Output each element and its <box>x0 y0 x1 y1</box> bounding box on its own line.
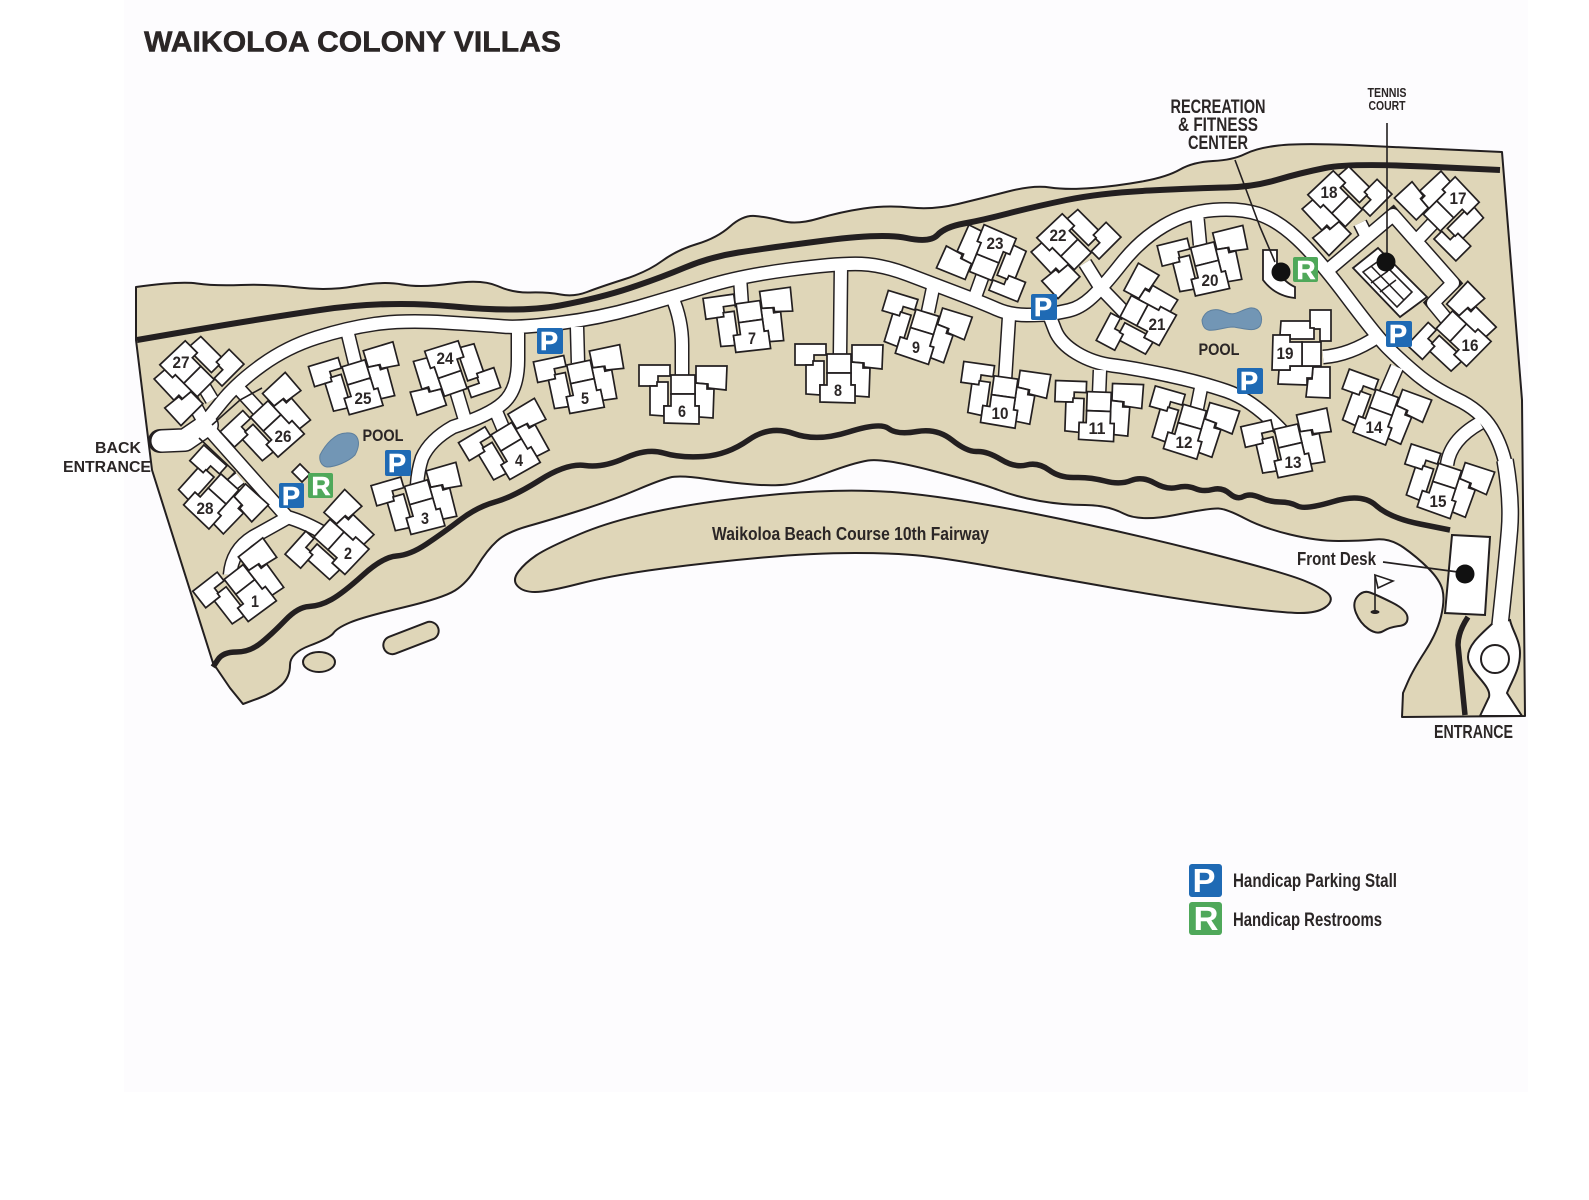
building 23 <box>936 214 1040 302</box>
building 8 <box>795 344 883 403</box>
icon: restroom 2: R <box>1296 255 1316 285</box>
legend <box>1189 862 1397 937</box>
thick top boundary line <box>137 165 1500 340</box>
label: tennis court: TENNIS <box>1368 85 1407 100</box>
label: front desk: Front Desk <box>1297 549 1377 569</box>
building 23: 23 <box>986 234 1004 253</box>
small sand oval <box>303 652 335 672</box>
building 10 <box>956 361 1051 432</box>
building 19: 19 <box>1276 344 1294 363</box>
icon: parking 5: P <box>1240 366 1258 396</box>
label: back entrance: BACK <box>95 440 141 457</box>
building 22 <box>1017 195 1121 299</box>
building 1: 1 <box>251 592 259 611</box>
building 25: 25 <box>354 389 372 408</box>
building 21: 21 <box>1148 315 1166 334</box>
tennis court <box>1353 248 1427 317</box>
icon: parking 6: P <box>1389 319 1407 349</box>
label: back entrance <box>63 440 151 476</box>
building 20 <box>1157 224 1257 303</box>
legend: restroom text: Handicap Restrooms <box>1233 910 1382 931</box>
icon: parking 4 <box>1031 292 1057 322</box>
building 2 <box>285 489 388 594</box>
tennis leader line <box>1386 123 1388 255</box>
building 26: 26 <box>274 427 292 446</box>
recreation building <box>1263 250 1295 298</box>
legend: parking icon <box>1189 862 1222 899</box>
label: recreation and fitness center <box>1170 97 1266 154</box>
label: tennis court: COURT <box>1368 98 1406 113</box>
building 3 <box>371 461 472 542</box>
building 11 <box>1054 381 1144 443</box>
thick bottom boundary line <box>213 426 1450 667</box>
front desk marker dot <box>1456 564 1474 584</box>
building 4 <box>458 397 564 493</box>
icon: golf flag <box>1370 575 1393 614</box>
roundabout circle <box>1481 645 1509 673</box>
building 11: 11 <box>1088 419 1106 438</box>
small restroom building <box>292 464 310 482</box>
building 22: 22 <box>1050 226 1066 245</box>
building 27: 27 <box>172 353 190 372</box>
legend: parking icon: P <box>1192 862 1216 899</box>
tennis marker dot <box>1376 252 1396 272</box>
building 20: 20 <box>1202 271 1218 290</box>
icon: parking 3 <box>537 326 563 356</box>
icon: parking 1 <box>279 481 304 511</box>
pool label east: POOL <box>1198 340 1240 359</box>
building 19 <box>1272 310 1331 398</box>
building 4: 4 <box>515 451 523 470</box>
icon: parking 5 <box>1237 366 1263 396</box>
building 5 <box>533 344 632 420</box>
building 7 <box>703 286 798 357</box>
entrance thick line <box>1458 617 1468 715</box>
building 16 <box>1407 281 1510 385</box>
putting green <box>1354 592 1408 633</box>
icon: parking 6 <box>1386 319 1412 349</box>
label: recreation and fitness center: & FITNESS <box>1178 115 1258 136</box>
building 15 <box>1393 444 1495 527</box>
building 8: 8 <box>834 381 842 400</box>
label: fairway: Waikoloa Beach Course 10th Fairway <box>712 524 989 544</box>
icon: parking 2: P <box>388 448 406 478</box>
building 21 <box>1096 263 1190 368</box>
building 3: 3 <box>421 509 429 528</box>
label: entrance: ENTRANCE <box>1434 722 1513 742</box>
building 17 <box>1394 157 1498 261</box>
building 27 <box>140 322 244 426</box>
building 14 <box>1329 369 1432 455</box>
pool west <box>320 433 358 467</box>
building 26 <box>220 372 325 475</box>
building 16: 16 <box>1462 336 1478 355</box>
building 24: 24 <box>436 349 454 368</box>
building 6: 6 <box>678 402 686 421</box>
icon: parking 2 <box>385 448 411 478</box>
label: back entrance: ENTRANCE <box>63 459 151 476</box>
building 18: 18 <box>1320 183 1338 202</box>
fairway <box>515 491 1331 613</box>
building 1 <box>193 537 298 638</box>
icon: restroom 1: R <box>312 471 331 501</box>
building 2: 2 <box>344 544 352 563</box>
building 14: 14 <box>1366 418 1383 437</box>
building 10: 10 <box>992 404 1008 423</box>
building 28 <box>164 445 269 548</box>
building 17: 17 <box>1450 189 1466 208</box>
building 5: 5 <box>581 389 589 408</box>
legend: restroom icon: R <box>1194 900 1219 937</box>
icon: parking 4: P <box>1034 292 1052 322</box>
icon: parking 1: P <box>282 481 300 511</box>
building 15: 15 <box>1430 492 1446 511</box>
building 12: 12 <box>1176 433 1192 452</box>
front desk leader line <box>1383 562 1458 572</box>
pool east <box>1202 308 1262 330</box>
building 25 <box>308 341 410 423</box>
recreation leader line <box>1235 160 1275 262</box>
icon: parking 3: P <box>540 326 558 356</box>
land area <box>136 144 1525 717</box>
pool label west: POOL <box>362 426 404 445</box>
label: recreation and fitness center: RECREATION <box>1170 97 1266 118</box>
recreation marker dot <box>1272 262 1290 282</box>
building 7: 7 <box>748 329 756 348</box>
building 13 <box>1241 407 1340 484</box>
front desk building <box>1445 535 1490 615</box>
title: WAIKOLOA COLONY VILLAS <box>144 26 561 58</box>
small sand pill <box>381 619 441 657</box>
building 12 <box>1139 386 1240 467</box>
building 9: 9 <box>912 338 920 357</box>
label: tennis court <box>1368 85 1407 113</box>
road network <box>160 210 1522 716</box>
building 18 <box>1288 152 1392 256</box>
legend: parking text: Handicap Parking Stall <box>1233 871 1397 892</box>
building 24 <box>398 332 501 416</box>
building 9 <box>871 290 972 373</box>
building 28: 28 <box>196 499 214 518</box>
building 13: 13 <box>1284 453 1302 472</box>
label: recreation and fitness center: CENTER <box>1188 133 1248 154</box>
building 6 <box>639 365 727 424</box>
